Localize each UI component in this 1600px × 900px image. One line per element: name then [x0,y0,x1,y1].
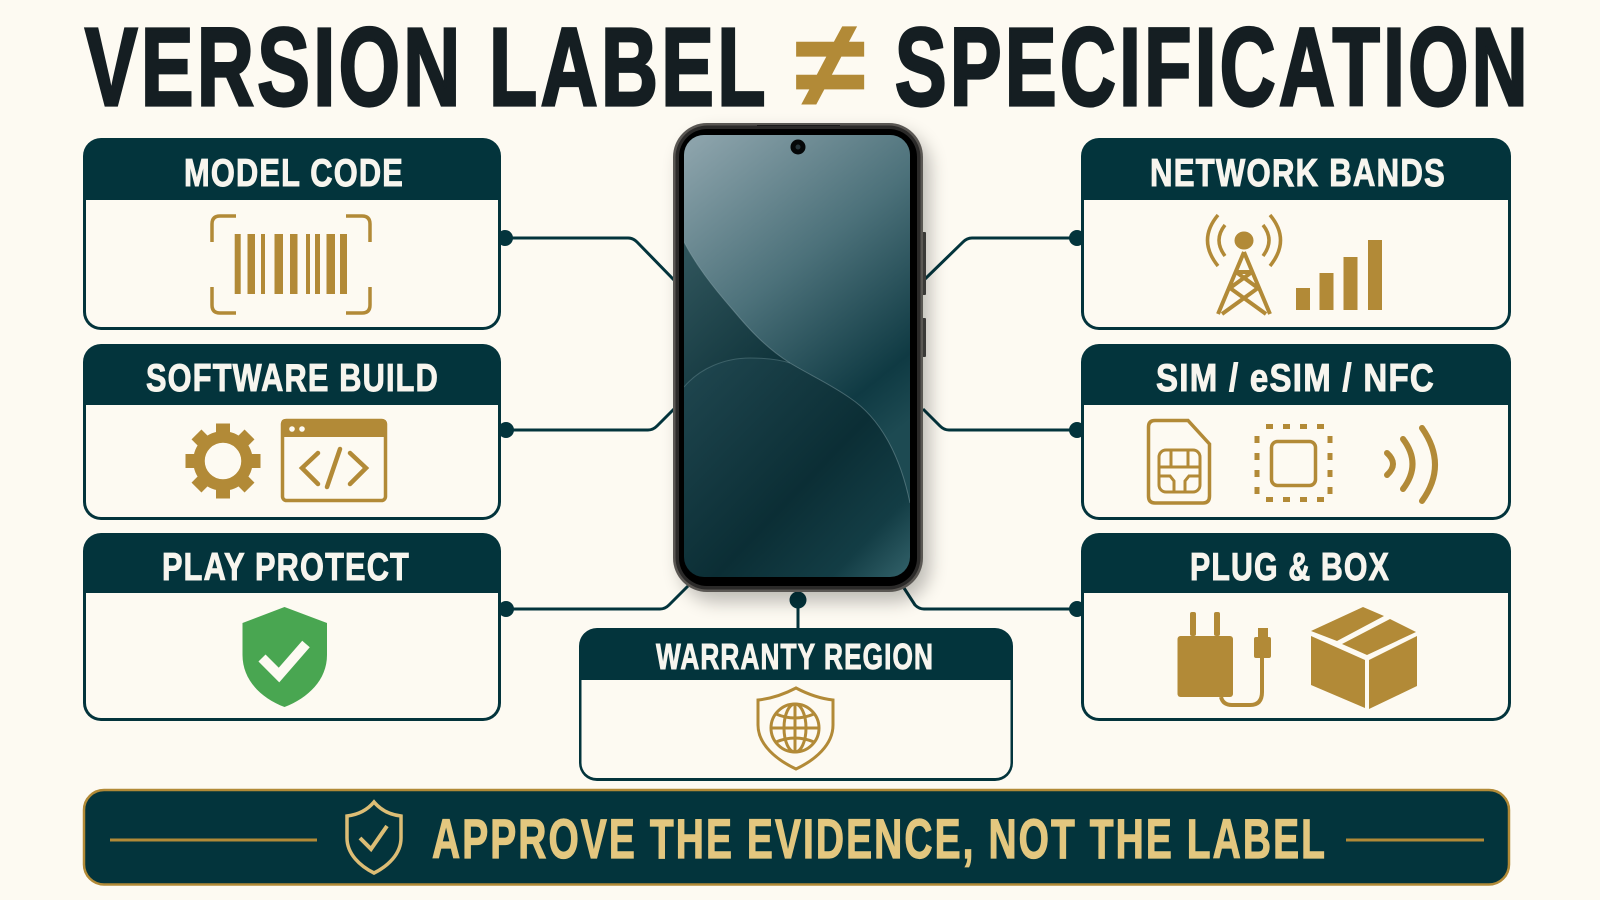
heading: plug and box: PLUG & BOX [1190,546,1390,589]
heading: software build: SOFTWARE BUILD [146,357,439,400]
connector: model code to phone [497,230,674,280]
phone shadow [680,132,930,602]
icon: gear [186,424,260,498]
panel: warranty region [579,628,1013,781]
phone side buttons [922,232,926,357]
panel: model code [83,138,501,330]
connector: network bands to phone [924,230,1085,280]
connector: warranty region to phone [790,592,806,630]
icon: cell tower [1208,215,1280,314]
icon: banner shield [347,802,401,873]
icon: code window [281,419,387,500]
title: version label: VERSION LABEL [85,6,769,129]
heading: network bands: NETWORK BANDS [1150,152,1446,195]
phone [673,123,930,602]
panel: plug and box [1081,533,1511,721]
icon: sim card [1148,420,1210,503]
heading: model code: MODEL CODE [184,152,404,195]
heading: sim esim nfc: SIM / eSIM / NFC [1156,357,1435,400]
connector: software build to phone [498,409,674,438]
banner: approve the evidence [84,790,1509,884]
banner rule right [1346,838,1484,842]
phone screen [684,135,910,577]
title: not-equal sign: ≠ [795,0,865,132]
phone camera [790,140,806,154]
icon: signal bars [1296,240,1382,310]
panel: network bands [1081,138,1511,330]
heading: warranty region: WARRANTY REGION [656,636,934,677]
connector: plug and box to phone [904,588,1085,617]
icon: nfc waves [1387,428,1435,501]
connector: play protect to phone [498,586,688,617]
icon: globe shield [758,688,833,769]
panel: sim esim nfc [1081,344,1511,520]
icon: box [1311,607,1417,709]
icon: esim chip [1257,426,1330,500]
banner rule left [110,838,317,842]
panel: play protect [83,533,501,721]
icon: barcode [212,216,370,313]
icon: green shield with check [242,607,327,707]
heading: play protect: PLAY PROTECT [162,546,410,589]
connector: sim to phone [923,409,1085,438]
title [85,0,1531,132]
icon: charger plug [1178,612,1271,705]
phone body [673,123,923,592]
panel: software build [83,344,501,520]
